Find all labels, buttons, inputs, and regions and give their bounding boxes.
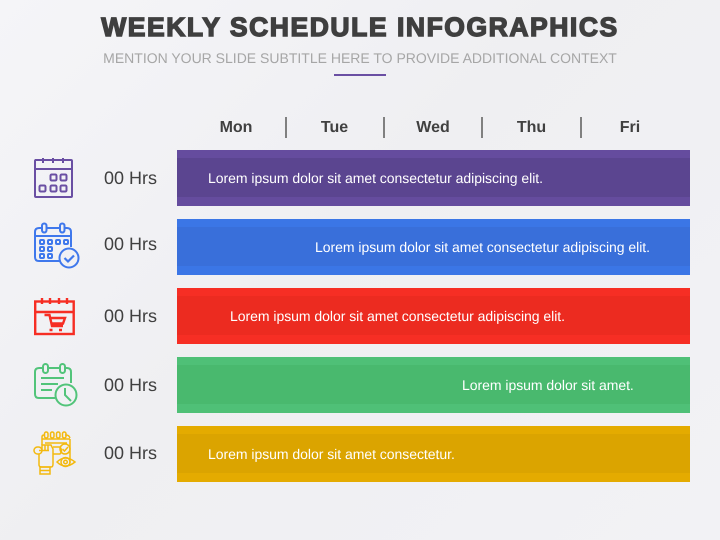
bar text: Lorem ipsum dolor sit amet consectetur adipiscing elit. (315, 239, 650, 255)
bar: row 3 red (177, 288, 690, 344)
day: Thu: Thu (517, 119, 546, 136)
day: Fri: Fri (620, 119, 640, 136)
bar: row 2 blue (177, 219, 690, 275)
day: Mon: Mon (220, 119, 252, 136)
title underline accent (334, 74, 386, 76)
label: hours row 2: 00 Hrs (104, 234, 157, 254)
label: hours row 3: 00 Hrs (104, 306, 157, 326)
label: hours row 5: 00 Hrs (104, 443, 157, 463)
day: Tue: Tue (321, 119, 348, 136)
weekday header (220, 117, 640, 138)
icon: calendar with cart (34, 298, 75, 336)
bar text: Lorem ipsum dolor sit amet consectetur adipiscing elit. (208, 170, 543, 186)
icon: calendar grid (34, 158, 73, 198)
label: hours row 1: 00 Hrs (104, 168, 157, 188)
icon: calendar with hand and eye (33, 431, 76, 475)
title: WEEKLY SCHEDULE INFOGRAPHICS (101, 12, 619, 42)
label: hours row 4: 00 Hrs (104, 375, 157, 395)
icon: calendar with clock (34, 363, 78, 406)
icon: calendar with check (34, 222, 80, 268)
bar: row 1 purple (177, 150, 690, 206)
subtitle: MENTION YOUR SLIDE SUBTITLE HERE TO PROVIDE ADDITIONAL CONTEXT (103, 50, 617, 66)
bar: row 4 green (177, 357, 690, 413)
bar: row 5 amber (177, 426, 690, 482)
bar text: Lorem ipsum dolor sit amet consectetur adipiscing elit. (230, 308, 565, 324)
bar text: Lorem ipsum dolor sit amet consectetur. (208, 446, 455, 462)
day: Wed: Wed (416, 119, 450, 136)
bar text: Lorem ipsum dolor sit amet. (462, 377, 634, 393)
